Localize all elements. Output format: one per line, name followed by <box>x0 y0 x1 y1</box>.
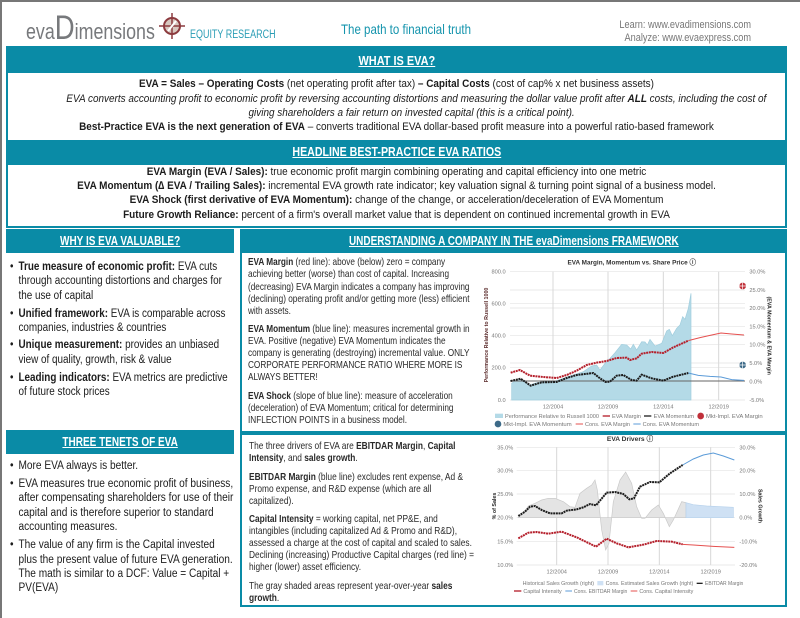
legend: EBITDAR Margin <box>705 581 743 587</box>
text block: EVA metrics: ALWAYS BETTER! <box>248 372 318 383</box>
text block: EVA metrics: EVA Shock (slope of blue line): measure of acceleration <box>248 391 453 402</box>
axis labels: 12/2004 <box>543 405 563 411</box>
legend: Cons. EBITDAR Margin <box>574 589 627 595</box>
line: capital intensity <box>518 532 734 547</box>
chart title: EVA Drivers ⓘ <box>607 434 653 443</box>
text block: drivers: assessed a charge at the cost of capital and scaled to sales. <box>249 538 472 549</box>
text block: EVA metrics: EVA. Positive (negative) EVA Momentum indicates the <box>248 336 446 347</box>
text block: ratios: EVA Margin (EVA / Sales): true economic profit margin combining operating and capital efficiency into one metric <box>147 166 646 178</box>
axis labels: 800.0 <box>492 270 506 276</box>
axis labels: 30.0% <box>739 445 755 451</box>
axis labels: 30.0% <box>749 270 765 276</box>
axis labels: 20.0% <box>497 516 513 522</box>
panel: three tenets <box>6 430 234 594</box>
contact links <box>619 19 751 44</box>
contact links: Analyze: www.evaexpress.com <box>625 32 751 44</box>
axis labels: 5.0% <box>749 361 762 367</box>
icon: market-implied momentum marker <box>739 362 746 368</box>
area: historical sales growth <box>518 472 686 550</box>
bullet list: tenets: • <box>10 460 14 472</box>
text block: EVA definition: EVA = Sales – Operating Costs (net operating profit after tax) – Capital Costs (cost of cap% x net business assets) <box>139 78 654 90</box>
bullet list: why valuable: the use of capital <box>18 290 93 302</box>
text block: drivers: Intensity, and sales growth. <box>249 453 358 464</box>
contact links: Learn: www.evadimensions.com <box>619 19 751 31</box>
line: EVA momentum <box>511 373 744 386</box>
axis labels: 10.0% <box>749 343 765 349</box>
bullet list: tenets: PV(EVA) <box>18 582 58 594</box>
axis labels: -10.0% <box>739 539 757 545</box>
legend: Mkt-Impl. EVA Momentum <box>503 422 572 428</box>
legend: Cons. EVA Margin <box>585 422 630 428</box>
chart title: EVA Margin, Momentum vs. Share Price ⓘ <box>568 258 696 267</box>
text block: drivers: EBITDAR Margin (blue line) excludes rent expense, Ad & <box>249 472 463 483</box>
text block: EVA metrics: achieving better (worse) than cost of capital. Increasing <box>248 269 449 280</box>
heading: why valuable <box>6 229 234 253</box>
bullet list: why valuable: • <box>10 261 13 273</box>
text block: EVA metrics: INFLECTION POINTS in a business model. <box>248 415 407 426</box>
legend: EVA Margin <box>612 414 641 420</box>
heading: what is EVA: WHAT IS EVA? <box>358 54 435 68</box>
text block: EVA definition: giving shareholders a fair return on invested capital (this is a critical point). <box>249 107 575 119</box>
logo <box>26 9 276 47</box>
axis labels: 12/2014 <box>649 569 670 575</box>
axis labels: 20.0% <box>739 469 755 475</box>
text block: drivers <box>249 441 474 604</box>
bullet list: tenets: • <box>10 478 14 490</box>
text block: drivers: intangibles (including capitalized Ad & Promo and R&D), <box>249 526 457 537</box>
bullet list: why valuable: through accounting distortions and charges for <box>18 275 222 287</box>
axis labels: 0.0% <box>739 516 752 522</box>
axis labels: 0.0 <box>498 398 506 404</box>
text block: ratios: EVA Momentum (∆ EVA / Trailing Sales): incremental EVA growth rate indicator; key valuation signal & turning point signal of a business model. <box>77 180 716 192</box>
bullet list: why valuable: of future stock prices <box>18 386 110 398</box>
left axis title: Performance Relative to Russell 1000 <box>484 288 490 382</box>
text block: drivers: higher (lower) asset efficiency. <box>249 562 361 573</box>
bullet list: why valuable: • <box>10 308 13 320</box>
bullet list: tenets: after compensating shareholders for use of their <box>18 492 233 504</box>
axis labels: 20.0% <box>749 306 765 312</box>
axis labels: 25.0% <box>749 288 765 294</box>
text block: EVA metrics: (deceleration) of EVA Momentum; critical for determining <box>248 403 453 414</box>
legend: Capital Intensity <box>523 589 562 595</box>
bullet list: why valuable: True measure of economic profit: EVA cuts <box>18 261 217 273</box>
area: estimated sales growth <box>686 503 733 518</box>
bullet list: why valuable: view of quality, growth, risk & value <box>18 354 172 366</box>
heading: headline ratios: HEADLINE BEST-PRACTICE EVA RATIOS <box>292 145 501 159</box>
line: EVA margin <box>511 333 744 378</box>
heading: understanding <box>240 229 787 253</box>
axis labels: 400.0 <box>492 334 506 340</box>
text block: ratios: EVA Shock (first derivative of EVA Momentum): change of the change, or acceleration/deceleration of EVA Momentum <box>130 194 663 206</box>
heading: understanding: UNDERSTANDING A COMPANY IN THE evaDimensions FRAMEWORK <box>349 234 678 248</box>
slogan: The path to financial truth <box>341 21 471 37</box>
bullet list: tenets: accounting measures. <box>18 521 117 533</box>
legend: EVA Momentum <box>654 414 694 420</box>
bullet list: tenets: • <box>10 539 14 551</box>
bullet list: why valuable: companies, industries & countries <box>18 322 166 334</box>
bullet list: tenets: plus the present value of future EVA generation. <box>18 554 233 566</box>
text block: EVA metrics: EVA Margin (red line): above (below) zero = company <box>248 257 445 268</box>
bullet list: why valuable <box>10 261 228 398</box>
text block: EVA metrics: EVA Momentum (blue line): measures incremental growth in <box>248 324 470 335</box>
axis labels: 12/2009 <box>598 569 618 575</box>
legend: Historical Sales Growth (right) <box>523 581 594 587</box>
bullet list: why valuable: • <box>10 372 13 384</box>
heading: three tenets <box>6 430 234 454</box>
bullet list: why valuable: Unified framework: EVA is comparable across <box>18 308 226 320</box>
axis labels: 200.0 <box>492 366 506 372</box>
heading: why valuable: WHY IS EVA VALUABLE? <box>60 234 180 248</box>
text block: EVA metrics: with assets. <box>248 306 291 317</box>
legend <box>514 581 743 595</box>
legend: Performance Relative to Russell 1000 <box>505 414 599 420</box>
panel: what is EVA <box>6 46 787 228</box>
text block: drivers: Promo expense, and R&D expense (which are all <box>249 484 431 495</box>
text block: drivers: Capital Intensity = working capital, net PP&E, and <box>249 514 438 525</box>
bullet list: tenets: EVA measures true economic profit of business, <box>18 478 233 490</box>
axis labels: 25.0% <box>497 492 513 498</box>
panel: understanding framework <box>240 229 787 433</box>
icon: logo globe crosshair <box>159 13 185 39</box>
legend: Mkt-Impl. EVA Margin <box>706 414 763 420</box>
chart: EVA margin, momentum vs share price <box>484 258 772 428</box>
text block: drivers: The three drivers of EVA are EBITDAR Margin, Capital <box>249 441 455 452</box>
text block: EVA metrics: company is generating (destroying) incremental value. ONLY <box>248 348 469 359</box>
logo tagline: EQUITY RESEARCH <box>190 29 276 41</box>
axis labels: 10.0% <box>497 563 513 569</box>
axis labels: 12/2014 <box>653 405 674 411</box>
text block: ratios <box>77 166 716 221</box>
legend: Cons. Estimated Sales Growth (right) <box>606 581 693 587</box>
text block: EVA metrics <box>248 257 470 426</box>
heading: three tenets: THREE TENETS OF EVA <box>62 435 178 449</box>
text block: drivers: Declining (increasing) Productive Capital charges (red line) = <box>249 550 474 561</box>
heading: what is EVA <box>8 48 785 73</box>
text block: drivers: growth. <box>249 593 279 604</box>
axis labels: 12/2004 <box>546 569 567 575</box>
left axis title: % of Sales <box>492 493 498 519</box>
legend: Cons. EVA Momentum <box>643 422 699 428</box>
axis labels: 15.0% <box>749 324 765 330</box>
bullet list: why valuable: Leading indicators: EVA metrics are predictive <box>18 372 228 384</box>
axis labels: 12/2019 <box>708 405 729 411</box>
chart: EVA drivers <box>492 434 763 595</box>
bullet list: tenets: The math is similar to a DCF: Value = Capital + <box>18 568 229 580</box>
axis labels: 15.0% <box>497 539 513 545</box>
text block: EVA definition <box>66 78 768 133</box>
axis labels: 0.0% <box>749 379 762 385</box>
bullet list: tenets: The value of any firm is the Capital invested <box>18 539 215 551</box>
bullet list: tenets: capital and is therefore superior to standard <box>18 507 214 519</box>
axis labels: 30.0% <box>497 469 513 475</box>
legend <box>495 413 763 428</box>
axis labels <box>497 445 757 575</box>
axis labels: 600.0 <box>492 301 506 307</box>
bullet list: why valuable: Unique measurement: provides an unbiased <box>18 339 219 351</box>
text block: EVA metrics: (decreasing) EVA Margin indicates a company has improving <box>248 282 469 293</box>
heading: headline ratios <box>8 140 785 165</box>
bullet list: tenets <box>10 460 234 594</box>
legend: Cons. Capital Intensity <box>639 589 693 595</box>
text block: EVA definition: EVA converts accounting profit to economic profit by reversing accounting distortions and measuring the dollar value profit after ALL costs, including the cost of <box>66 92 766 104</box>
axis labels <box>492 270 765 411</box>
text block: EVA definition: Best-Practice EVA is the next generation of EVA – converts traditional EVA dollar-based profit measure into a powerful ratio-based framework <box>79 121 714 133</box>
logo wordmark: evaDimensions <box>26 9 155 47</box>
right axis title: Sales Growth <box>757 489 763 523</box>
panel: EVA drivers <box>240 433 787 607</box>
text block: EVA metrics: CORPORATE PERFORMANCE RATIO WHERE MORE IS <box>248 360 462 371</box>
right axis title: (EVA Momentum & EVA Margin <box>765 296 771 375</box>
axis labels: -20.0% <box>739 563 757 569</box>
panel: why is EVA valuable <box>6 229 234 398</box>
axis labels: -5.0% <box>749 398 764 404</box>
axis labels: 12/2009 <box>598 405 618 411</box>
icon: market-implied margin marker <box>739 283 746 289</box>
axis labels: 12/2019 <box>700 569 721 575</box>
axis labels: 35.0% <box>497 445 513 451</box>
text block: drivers: The gray shaded areas represent year-over-year sales <box>249 581 452 592</box>
text block: drivers: capitalized). <box>249 496 294 507</box>
line: EBITDAR margin <box>518 453 734 516</box>
text block: ratios: Future Growth Reliance: percent of a firm's overall market value that is dependent on continued incremental growth in EVA <box>123 209 670 221</box>
bullet list: tenets: More EVA always is better. <box>18 460 138 472</box>
text block: EVA metrics: (declining) operating profit and/or getting more (less) efficient <box>248 294 469 305</box>
bullet list: why valuable: • <box>10 339 13 351</box>
area: relative performance <box>512 293 691 400</box>
axis labels: 10.0% <box>739 492 755 498</box>
